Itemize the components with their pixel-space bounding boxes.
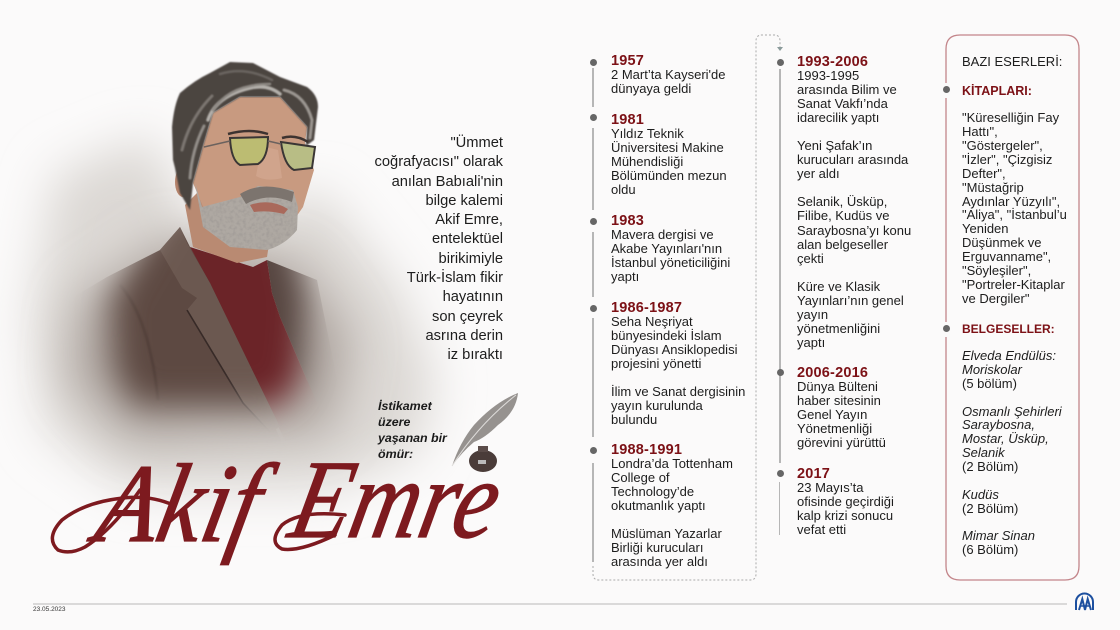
intro text: birikimiyle [439,251,503,267]
1983 entry [590,213,730,297]
2006-2016 entry: 2006-2016 [797,365,868,381]
intro text: son çeyrek [432,309,503,325]
1983 entry: 1983 [611,213,644,229]
title: Akif Emre: Emre [279,438,512,562]
2006-2016 entry: görevini yürüttü [797,435,886,450]
subtitle: ömür: [378,447,413,461]
face and hair [172,62,318,263]
documentaries list [962,348,1062,557]
2017 entry: vefat etti [797,522,846,537]
intro text: "Ümmet [450,135,503,151]
quill and inkwell icon [452,393,518,472]
1986-1987 entry: bünyesindeki İslam [611,328,722,343]
documentaries list: Mostar, Üsküp, [962,431,1049,446]
books list: "İzler", "Çizgisiz [962,152,1052,167]
subtitle: İstikamet [378,399,432,413]
1986-1987 entry: İlim ve Sanat dergisinin [611,384,745,399]
books heading: KİTAPLARI: [962,84,1032,98]
1986-1987 entry: projesini yönetti [611,356,701,371]
1993-2006 entry: yayın [797,307,828,322]
1983 entry: Akabe Yayınları'nın [611,241,722,256]
books list: Defter", [962,166,1006,181]
1993-2006 entry: çekti [797,251,824,266]
1986-1987 entry: Seha Neşriyat [611,314,693,329]
1993-2006 entry: Küre ve Klasik [797,279,880,294]
1993-2006 entry: 1993-2006 [797,54,868,70]
documentaries list: (2 Bölüm) [962,501,1018,516]
1981 entry: Mühendisliği [611,154,683,169]
documentaries list: (2 Bölüm) [962,459,1018,474]
1988-1991 entry: okutmanlık yaptı [611,498,706,513]
timeline column 2 [777,54,911,537]
2017 entry [777,466,894,537]
1983 entry: İstanbul yöneticiliğini [611,255,730,270]
books list [962,110,1067,306]
subtitle: yaşanan bir [378,431,447,445]
intro text: iz bıraktı [447,347,503,363]
1981 entry: Üniversitesi Makine [611,140,724,155]
1957 entry [590,53,725,107]
documentaries heading: BELGESELLER: [962,322,1055,336]
intro text: hayatının [443,289,503,305]
works panel [943,54,1067,557]
AA logo [1076,594,1093,610]
1993-2006 entry: idarecilik yaptı [797,110,879,125]
1957 entry: dünyaya geldi [611,81,691,96]
1986-1987 entry: Dünyası Ansiklopedisi [611,342,737,357]
subtitle: üzere [378,415,410,429]
intro text: entelektüel [432,231,503,247]
1988-1991 entry: arasında yer aldı [611,554,708,569]
1993-2006 entry: Selanik, Üsküp, [797,194,887,209]
1957 entry: 1957 [611,53,644,69]
title: Akif Emre: Akif [81,442,285,566]
documentaries list: Elveda Endülüs: [962,348,1056,363]
1993-2006 entry: alan belgeseller [797,237,888,252]
1988-1991 entry: 1988-1991 [611,442,682,458]
documentaries list: Mimar Sinan [962,528,1035,543]
1981 entry [590,112,727,210]
documentaries list: (5 bölüm) [962,376,1017,391]
documentaries list: Osmanlı Şehirleri [962,404,1062,418]
1993-2006 entry: Saraybosna’yı konu [797,223,911,238]
2006-2016 entry [777,365,886,463]
1986-1987 entry: yayın kurulunda [611,398,703,413]
dashed connector between timeline columns [593,35,780,580]
2017 entry: ofisinde geçirdiği [797,494,894,509]
1988-1991 entry [590,442,733,569]
1993-2006 entry: yer aldı [797,166,840,181]
1993-2006 entry: yaptı [797,335,825,350]
footer rule [33,603,1067,605]
works panel frame [946,35,1079,580]
books list: "Göstergeler", [962,138,1043,153]
intro text: asrına derin [425,328,503,344]
books list: "Aliya", "İstanbul’u [962,207,1067,222]
books list: "Müstağrip [962,180,1024,195]
1986-1987 entry: bulundu [611,412,657,427]
books list: "Portreler-Kitaplar [962,277,1065,292]
intro text: anılan Babıali'nin [392,174,503,190]
2006-2016 entry: haber sitesinin [797,393,881,408]
1981 entry: Bölümünden mezun [611,168,727,183]
2017 entry: 2017 [797,466,830,482]
1993-2006 entry: 1993-1995 [797,68,859,83]
documentaries list: Kudüs [962,487,999,502]
1986-1987 entry: 1986-1987 [611,300,682,316]
1981 entry: oldu [611,182,636,197]
books list: ve Dergiler" [962,291,1029,306]
1988-1991 entry: Müslüman Yazarlar [611,526,722,541]
2006-2016 entry: Dünya Bülteni [797,379,878,394]
documentaries list: Saraybosna, [962,417,1035,432]
2006-2016 entry: Yönetmenliği [797,421,872,436]
documentaries list: Moriskolar [962,362,1022,377]
1981 entry: Yıldız Teknik [611,126,684,141]
connector arrowhead [777,47,783,51]
1993-2006 entry [777,54,911,381]
1957 entry: 2 Mart’ta Kayseri'de [611,67,725,82]
1981 entry: 1981 [611,112,644,128]
1983 entry: Mavera dergisi ve [611,227,714,242]
1988-1991 entry: Technology’de [611,484,694,499]
1993-2006 entry: Yayınları’nın genel [797,293,904,308]
title flourishes [52,490,345,552]
1993-2006 entry: Filibe, Kudüs ve [797,208,890,223]
1988-1991 entry: College of [611,470,670,485]
1988-1991 entry: Londra’da Tottenham [611,456,733,471]
intro text: Akif Emre, [435,212,503,228]
1993-2006 entry: yönetmenliğini [797,321,880,336]
1988-1991 entry: Birliği kurucuları [611,540,703,555]
2017 entry: kalp krizi sonucu [797,508,893,523]
subtitle [378,399,448,461]
documentaries list: Selanik [962,445,1005,460]
1983 entry: yaptı [611,269,639,284]
books list: "Küreselliğin Fay [962,110,1059,125]
books list: Yeniden [962,221,1009,236]
2017 entry: 23 Mayıs’ta [797,480,863,495]
books list: Hattı", [962,124,998,139]
2006-2016 entry: Genel Yayın [797,407,867,422]
books list: Düşünmek ve [962,235,1041,250]
1993-2006 entry: Yeni Şafak’ın [797,138,872,153]
books list: Erguvanname", [962,249,1051,264]
1986-1987 entry [590,300,745,437]
title: Akif Emre [52,438,512,566]
1993-2006 entry: Sanat Vakfı’nda [797,96,888,111]
1993-2006 entry: kurucuları arasında [797,152,908,167]
intro text: coğrafyacısı" olarak [375,154,503,170]
glasses [204,137,315,170]
books list: Aydınlar Yüzyılı", [962,194,1060,209]
works heading: BAZI ESERLERİ: [962,54,1062,69]
date: 23.05.2023 [33,606,66,613]
1993-2006 entry: arasında Bilim ve [797,82,897,97]
documentaries list: (6 Bölüm) [962,542,1018,557]
intro text: Türk-İslam fikir [407,270,503,286]
intro text: bilge kalemi [425,193,503,209]
intro text [375,134,503,363]
timeline column 1 [590,53,745,569]
books list: "Söyleşiler", [962,263,1031,278]
